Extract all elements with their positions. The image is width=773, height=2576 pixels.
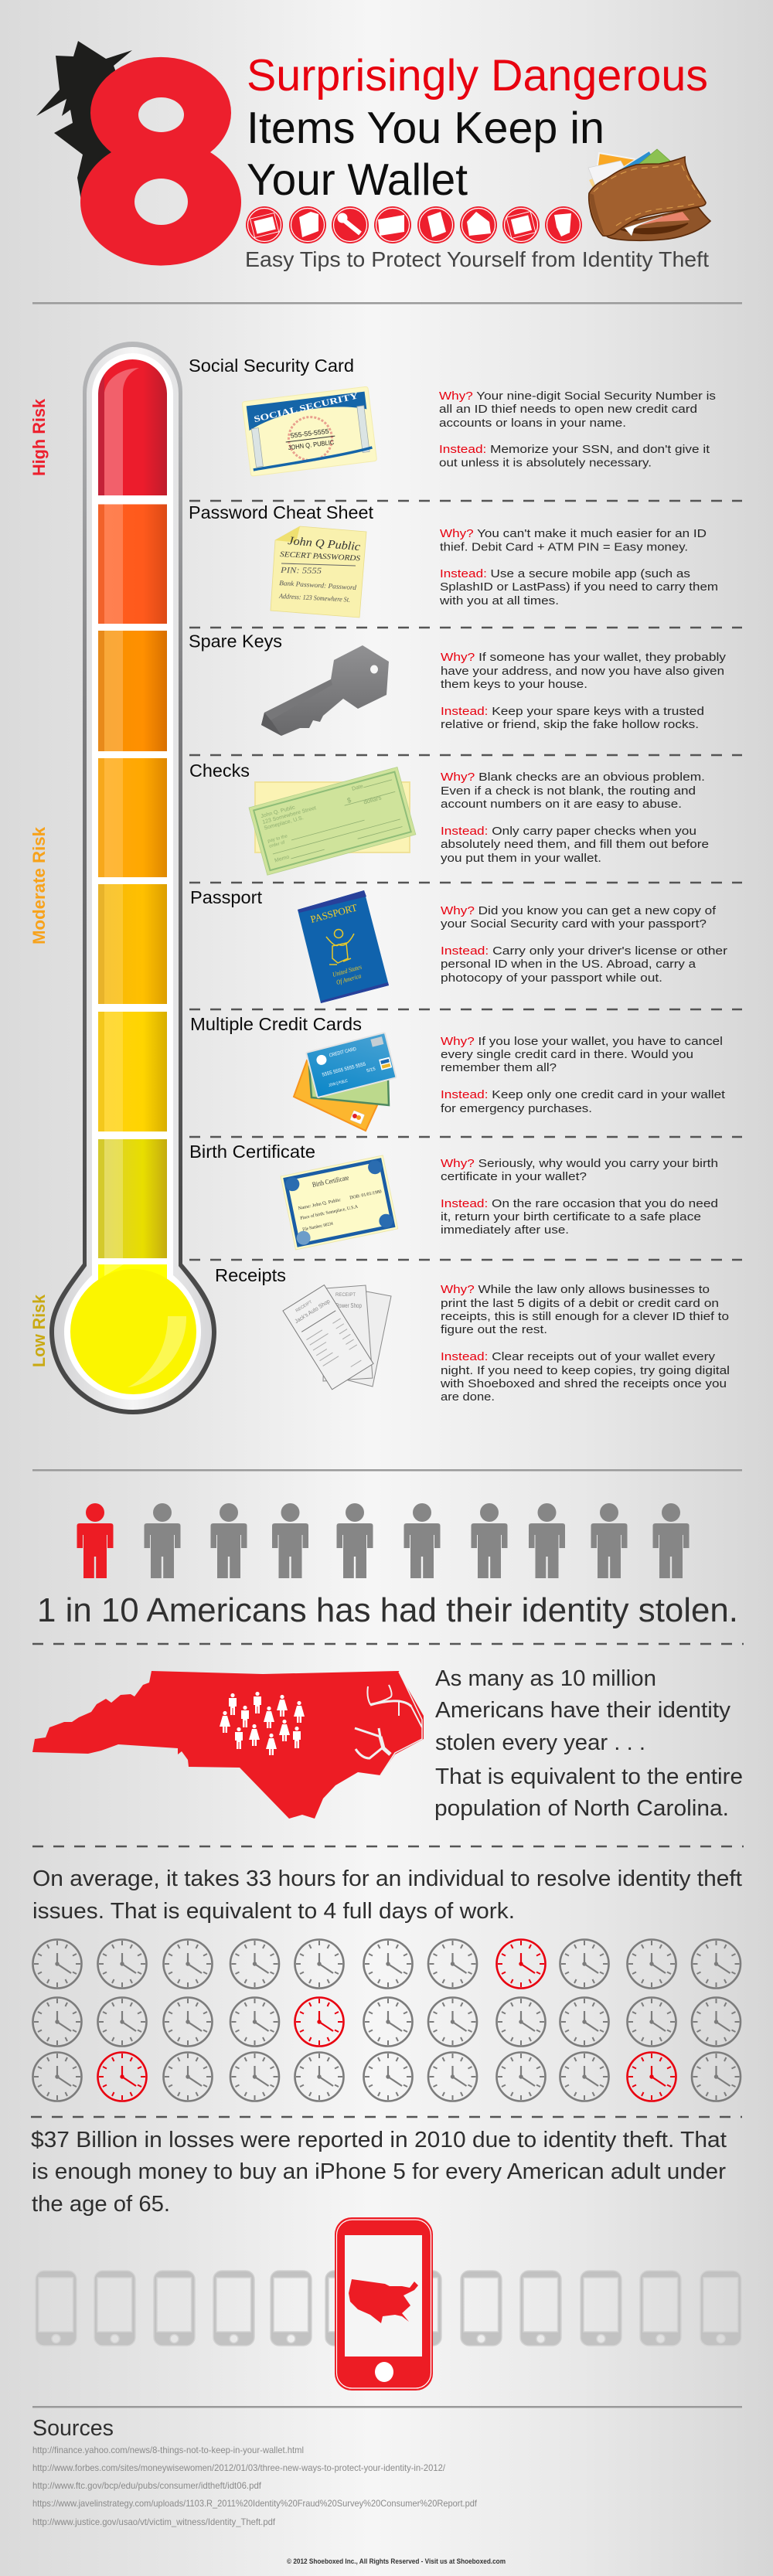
- instead text: absolutely need them, and fill them out before: [441, 838, 709, 851]
- instead text: photocopy of your passport while out.: [441, 972, 662, 985]
- header: [36, 41, 710, 271]
- illustration: password note: SECERT PASSWORDS: [280, 550, 360, 563]
- heading: Receipts: [215, 1265, 286, 1285]
- heading: Checks: [189, 761, 250, 781]
- illustration: checks: Someplace, U.S.: [264, 815, 305, 832]
- stat: 10 million Americans: [434, 1666, 743, 1821]
- illustration: passport: PASSPORT: [309, 901, 359, 925]
- stat: 33 hours: [32, 1866, 742, 1924]
- risk label: low: Low Risk: [29, 1295, 49, 1367]
- divider: [32, 302, 742, 305]
- illustration: receipts: Power Shop: [335, 1302, 362, 1309]
- illustration: passport: Of America: [335, 972, 362, 986]
- footer: © 2012 Shoeboxed Inc., All Rights Reserved - Visit us at Shoeboxed.com: [287, 2557, 506, 2566]
- illustration: checks: pay to the: [267, 834, 288, 844]
- heading: Passport: [190, 887, 262, 907]
- instead text: with Shoeboxed and shred the receipts once you: [440, 1377, 727, 1390]
- stat: 37 billion: $37 Billion in losses were reported in 2010 due to identity theft. That: [31, 2128, 727, 2152]
- stat: 33 hours: issues. That is equivalent to 4 full days of work.: [32, 1899, 515, 1924]
- panel: Birth Certificate: [189, 1142, 718, 1250]
- instead text: Instead: Keep only one credit card in your wallet: [441, 1088, 726, 1101]
- subtitle: Easy Tips to Protect Yourself from Identity Theft: [245, 247, 709, 271]
- illustration: checks: order of: [269, 840, 285, 849]
- illustration: password note: [271, 526, 366, 618]
- stat: 1 in 10 Americans: 1 in 10 Americans has had their identity stolen.: [37, 1592, 738, 1629]
- illustration: receipts: [283, 1285, 391, 1390]
- why text: certificate in your wallet?: [441, 1170, 587, 1183]
- instead text: personal ID when in the US. Abroad, carry a: [441, 958, 696, 971]
- illustration: birth certificate: Name: John Q. Public: [298, 1198, 342, 1211]
- why text: Why? If you lose your wallet, you have to cancel: [441, 1035, 723, 1048]
- thermometer segment 3: orange: [98, 631, 167, 751]
- illustration: checks: $: [346, 796, 352, 805]
- title: [247, 51, 708, 205]
- thermometer segment 6: yellow-gold: [98, 1012, 167, 1131]
- instead text: night. If you need to keep copies, try going digital: [441, 1364, 730, 1377]
- instead text: Instead: Clear receipts out of your wallet every: [441, 1350, 716, 1363]
- clock grid: [32, 1940, 741, 2101]
- instead text: SplashID or LastPass) if you need to carry them: [440, 580, 718, 594]
- why text: Why? While the law only allows businesses to: [441, 1283, 710, 1296]
- icon: USA map: [349, 2279, 418, 2323]
- why text: them keys to your house.: [441, 678, 587, 691]
- illustration: birth certificate: Birth Certificate: [312, 1173, 349, 1189]
- thermometer segment 4: amber: [98, 758, 167, 877]
- illustration: password note: Bank Password: Password: [279, 579, 357, 591]
- thermometer bulb: [70, 1264, 196, 1394]
- panel: Social Security Card: [189, 356, 716, 476]
- why text: have your address, and now you have also given: [441, 665, 724, 678]
- map: North Carolina: [32, 1671, 424, 1819]
- row of grey phones: [36, 2271, 741, 2346]
- pictogram: 1 in 10 people: [77, 1503, 690, 1578]
- icon: spy silhouette: [36, 41, 132, 205]
- why text: [441, 1035, 723, 1074]
- why text: every single credit card in there. Would you: [441, 1048, 693, 1061]
- thermometer segment 5: gold: [98, 884, 167, 1004]
- illustration: checks: [249, 767, 416, 875]
- illustration: social security card: [242, 386, 377, 476]
- illustration: password note: Address: 123 Somewhere St.: [278, 592, 350, 604]
- illustration: credit cards: 5/15: [366, 1067, 376, 1074]
- illustration: checks: John Q. Public: [261, 805, 296, 819]
- big red number 8: [80, 57, 241, 266]
- divider: [32, 1469, 742, 1472]
- why text: Why? Seriously, why would you carry your birth: [441, 1157, 718, 1170]
- source links: http://www.justice.gov/usao/vt/victim_witness/Identity_Theft.pdf: [32, 2516, 276, 2527]
- thermometer glass tube and bulb: [49, 342, 216, 1414]
- instead text: it, return your birth certificate to a safe place: [441, 1210, 701, 1223]
- title: Your Wallet: [247, 155, 468, 205]
- title: Surprisingly Dangerous: [247, 51, 708, 100]
- illustration: password note: John Q Public: [288, 535, 361, 553]
- source links: https://www.javelinstrategy.com/uploads/1103.R_2011%20Identity%20Fraud%20Survey%20Consumer%20Report.pdf: [32, 2498, 478, 2509]
- instead text: [441, 944, 727, 985]
- stat: 37 billion: is enough money to buy an iPhone 5 for every American adult under: [32, 2159, 727, 2184]
- instead text: Instead: Carry only your driver's license or other: [441, 944, 727, 958]
- illustration: receipts: Jack's Auto Shop: [294, 1298, 331, 1325]
- why text: [440, 527, 707, 553]
- why text: print the last 5 digits of a debit or credit card on: [441, 1297, 719, 1310]
- instead text: with you at all times.: [439, 594, 559, 607]
- illustration: passport: [298, 890, 389, 1003]
- stat: 37 billion: [31, 2128, 727, 2217]
- sources: [32, 2416, 478, 2527]
- illustration: credit cards: 5555 5555 5555 5555: [322, 1061, 366, 1078]
- red phone with USA map: [335, 2217, 433, 2391]
- instead text: immediately after use.: [441, 1223, 569, 1237]
- instead text: [441, 825, 709, 865]
- why text: [439, 390, 716, 430]
- instead text: [441, 1197, 718, 1237]
- stat: 10 million Americans: population of North Carolina.: [434, 1796, 729, 1821]
- illustration: key: [261, 645, 389, 736]
- title: Items You Keep in: [247, 104, 604, 153]
- source links: http://finance.yahoo.com/news/8-things-not-to-keep-in-your-wallet.html: [32, 2445, 304, 2455]
- risk label: high: High Risk: [29, 399, 49, 476]
- instead text: [441, 1088, 726, 1115]
- source links: http://www.forbes.com/sites/moneywisewomen/2012/01/03/three-new-ways-to-protect-your-identity-in-2012/: [32, 2462, 446, 2473]
- thermometer: [49, 342, 216, 1414]
- illustration: checks: 123 Somewhere Street: [262, 805, 317, 825]
- divider: [32, 2406, 742, 2408]
- instead text: Instead: Only carry paper checks when you: [441, 825, 696, 838]
- illustration: checks: Date: [352, 784, 364, 792]
- illustration: birth certificate: Place of birth: Someplace, U.S.A: [300, 1204, 359, 1221]
- why text: receipts, this is still enough for a clever ID thief to: [441, 1310, 729, 1323]
- instead text: [440, 1350, 730, 1404]
- illustration: passport: United States: [332, 962, 363, 978]
- panel: Password Cheat Sheet: [189, 502, 718, 618]
- heading: Spare Keys: [189, 631, 282, 651]
- stat: 33 hours: On average, it takes 33 hours for an individual to resolve identity theft: [32, 1866, 742, 1891]
- why text: Why? Did you know you can get a new copy of: [441, 904, 717, 917]
- why text: Even if a check is not blank, the routing and: [441, 784, 696, 798]
- instead text: for emergency purchases.: [441, 1102, 592, 1115]
- illustration: social security card: 555-55-5555: [290, 427, 329, 440]
- why text: Why? If someone has your wallet, they probably: [441, 651, 727, 664]
- instead text: out unless it is absolutely necessary.: [439, 456, 652, 470]
- why text: accounts or loans in your name.: [439, 417, 626, 430]
- white people inside map: [220, 1692, 305, 1755]
- stat: 10 million Americans: As many as 10 million: [435, 1666, 656, 1691]
- instead text: you put them in your wallet.: [441, 852, 601, 865]
- illustration: credit cards: JOHN Q PUBLIC: [329, 1079, 349, 1088]
- why text: your Social Security card with your passport?: [441, 917, 707, 931]
- why text: account numbers on it are easy to abuse.: [441, 798, 682, 811]
- heading: Password Cheat Sheet: [189, 502, 373, 522]
- stat: 37 billion: the age of 65.: [32, 2192, 170, 2217]
- illustration: credit cards: CREDIT CARD: [329, 1046, 357, 1059]
- stat: 10 million Americans: stolen every year . . .: [435, 1730, 645, 1755]
- instead text: [439, 567, 718, 607]
- why text: [441, 1157, 718, 1183]
- heading: Multiple Credit Cards: [190, 1014, 362, 1034]
- stat: 10 million Americans: Americans have their identity: [435, 1698, 731, 1723]
- icon: wallet: [588, 149, 710, 240]
- source links: http://www.ftc.gov/bcp/edu/pubs/consumer/idtheft/idt06.pdf: [32, 2480, 262, 2491]
- instead text: Instead: Use a secure mobile app (such as: [440, 567, 690, 580]
- panel: Receipts: [215, 1265, 730, 1404]
- instead text: Instead: On the rare occasion that you do need: [441, 1197, 718, 1210]
- thermometer segment 7: yellow: [98, 1139, 167, 1258]
- stat: 10 million Americans: That is equivalent to the entire: [435, 1764, 743, 1789]
- illustration: birth certificate: File Number: 00234: [302, 1222, 333, 1233]
- illustration: receipts: RECEIPT: [295, 1300, 314, 1314]
- illustration: checks: dollars: [363, 795, 382, 805]
- why text: [441, 651, 727, 691]
- thermometer segment 2: orange-red: [98, 504, 167, 624]
- heading: Birth Certificate: [189, 1142, 315, 1162]
- why text: thief. Debit Card + ATM PIN = Easy money.: [440, 541, 688, 553]
- heading: Social Security Card: [189, 356, 354, 376]
- illustration: password note: PIN: 5555: [280, 566, 322, 576]
- instead text: [439, 443, 710, 470]
- why text: Why? Blank checks are an obvious problem.: [441, 771, 705, 784]
- instead text: relative or friend, skip the fake hollow rocks.: [441, 718, 699, 731]
- sources heading: Sources: [32, 2416, 114, 2441]
- why text: [441, 1283, 729, 1336]
- illustration: social security card: JOHN Q. PUBLIC: [288, 438, 335, 451]
- why text: figure out the rest.: [441, 1323, 547, 1336]
- panel: Multiple Credit Cards: [190, 1014, 726, 1131]
- why text: [441, 904, 717, 931]
- instead text: [441, 705, 704, 731]
- instead text: Instead: Keep your spare keys with a trusted: [441, 705, 704, 718]
- illustration: birth certificate: DOB: 01/01/1980: [349, 1189, 382, 1201]
- why text: Why? You can't make it much easier for an ID: [440, 527, 707, 540]
- thermometer segment 1: red: [98, 359, 167, 495]
- illustration: checks: Memo: [274, 855, 290, 864]
- why text: [441, 771, 705, 811]
- illustration: social security card: SOCIAL SECURITY: [253, 391, 359, 424]
- instead text: are done.: [441, 1390, 495, 1404]
- why text: Why? Your nine-digit Social Security Number is: [439, 390, 716, 403]
- instead text: Instead: Memorize your SSN, and don't give it: [439, 443, 710, 456]
- row of eight item icons: [246, 206, 582, 243]
- panel: Checks: [189, 761, 709, 875]
- panel: Passport: [190, 887, 727, 1003]
- why text: remember them all?: [441, 1061, 557, 1074]
- why text: all an ID thief needs to open new credit card: [439, 403, 697, 416]
- illustration: birth certificate: [281, 1155, 398, 1250]
- risk label: moderate: Moderate Risk: [29, 827, 49, 944]
- illustration: receipts: RECEIPT: [335, 1293, 356, 1298]
- panel: Spare Keys: [189, 631, 727, 736]
- source links: [32, 2445, 478, 2527]
- illustration: credit cards: [294, 1033, 397, 1131]
